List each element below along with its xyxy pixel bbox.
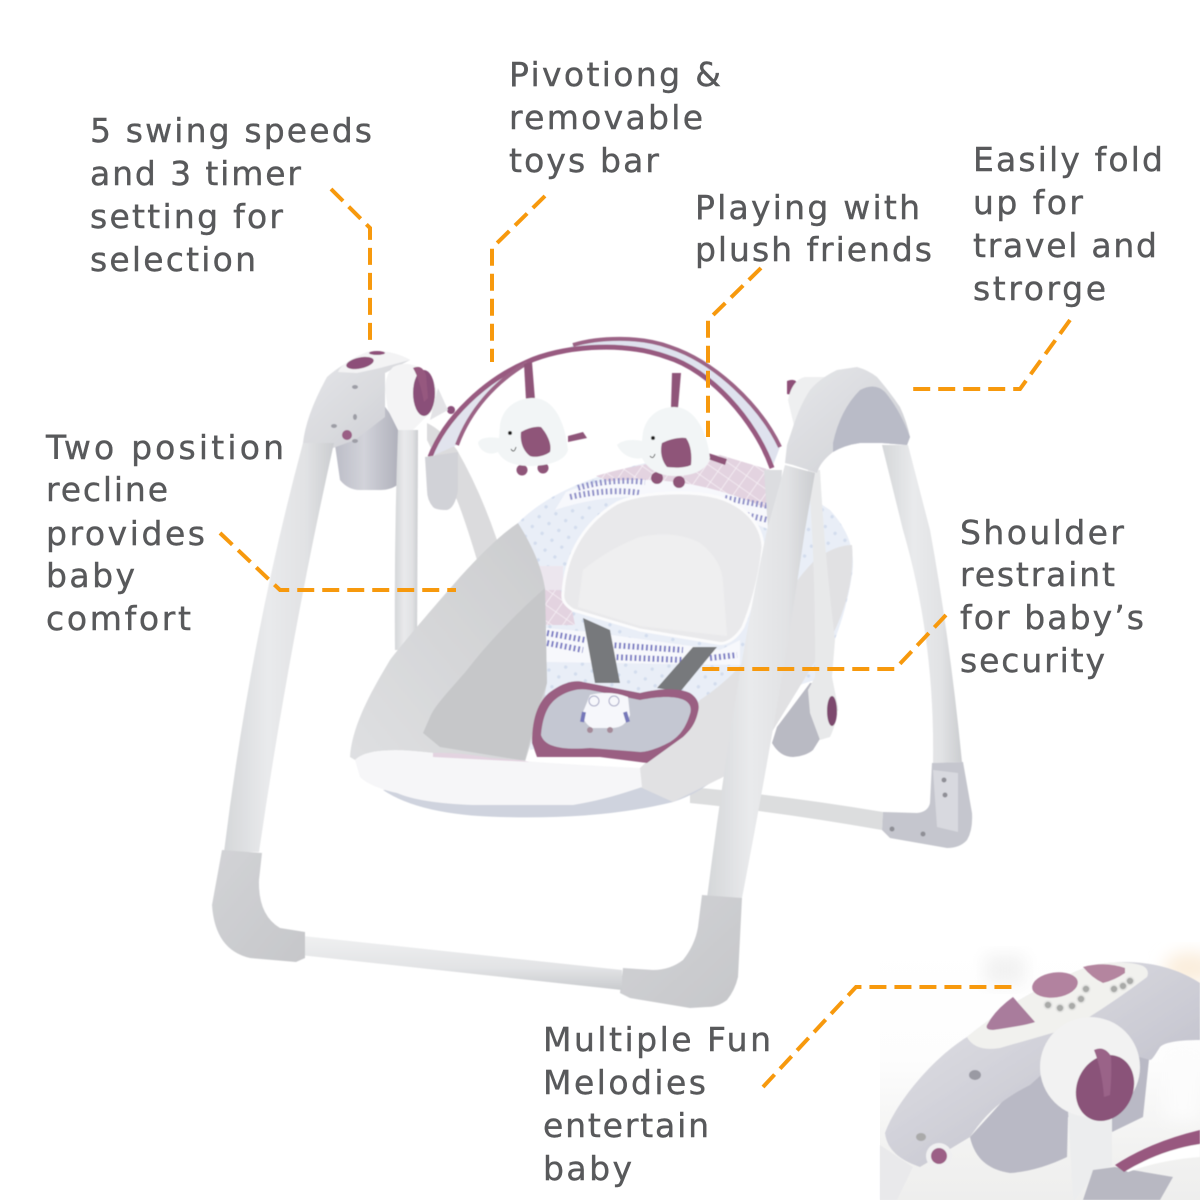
rear legs and back bar	[427, 377, 972, 848]
inset photo: control panel close-up	[880, 945, 1200, 1200]
text: folding: Easily fold	[973, 140, 1163, 179]
toy arch bar	[430, 339, 780, 468]
callout line: plush friends	[708, 268, 761, 437]
text: melodies: Melodies	[543, 1063, 706, 1102]
text: recline: comfort	[46, 599, 191, 638]
text: recline: provides	[46, 514, 205, 553]
left arch clip	[425, 452, 458, 510]
callout line: melodies	[763, 987, 1015, 1087]
callout line: recline	[220, 533, 456, 590]
text: swing speeds: selection	[90, 240, 256, 279]
right front leg and arched top	[620, 367, 910, 1008]
right hub stem	[772, 470, 838, 757]
callout line: shoulder restraint	[698, 615, 946, 669]
text: plush friends: Playing with	[695, 188, 920, 227]
text: toys bar: Pivotiong &	[509, 55, 721, 94]
text: shoulder restraint: for baby’s	[960, 598, 1144, 637]
plush elephant toy left	[478, 362, 587, 476]
text: swing speeds: 5 swing speeds	[90, 111, 372, 150]
text: swing speeds: and 3 timer	[90, 154, 301, 193]
text: plush friends	[695, 188, 932, 269]
text: swing speeds: setting for	[90, 197, 283, 236]
callout line: toys bar	[492, 196, 545, 362]
text: toys bar: toys bar	[509, 141, 659, 180]
callout line: speeds	[331, 189, 370, 345]
text: toys bar	[509, 55, 721, 180]
text: folding	[973, 140, 1163, 308]
text: recline: baby	[46, 556, 135, 595]
text: plush friends: plush friends	[695, 230, 932, 269]
text: folding: travel and	[973, 226, 1157, 265]
text: swing speeds	[90, 111, 372, 279]
callout line: fold	[912, 320, 1070, 389]
seat straps	[583, 618, 717, 692]
text: melodies: baby	[543, 1149, 632, 1188]
text: recline: Two position	[45, 428, 284, 467]
text: recline	[45, 428, 284, 638]
headrest pillow	[563, 493, 763, 643]
text: shoulder restraint: Shoulder	[960, 513, 1124, 552]
swing seat	[350, 455, 853, 817]
left front leg	[224, 443, 334, 852]
text: melodies: entertain	[543, 1106, 709, 1145]
plush elephant toy right	[617, 373, 727, 488]
text: folding: up for	[973, 183, 1083, 222]
text: shoulder restraint	[960, 513, 1144, 680]
text: shoulder restraint: security	[960, 641, 1105, 680]
front bar and left foot	[212, 850, 622, 990]
right arch clip	[764, 470, 782, 560]
text: toys bar: removable	[509, 98, 703, 137]
left hub and stem	[303, 351, 455, 650]
text: folding: strorge	[973, 269, 1106, 308]
text: shoulder restraint: restraint	[960, 555, 1115, 594]
text: recline: recline	[46, 470, 168, 509]
baby swing product	[212, 339, 972, 1008]
owl pad	[532, 681, 699, 763]
text: melodies	[543, 1020, 771, 1188]
text: melodies: Multiple Fun	[543, 1020, 771, 1059]
